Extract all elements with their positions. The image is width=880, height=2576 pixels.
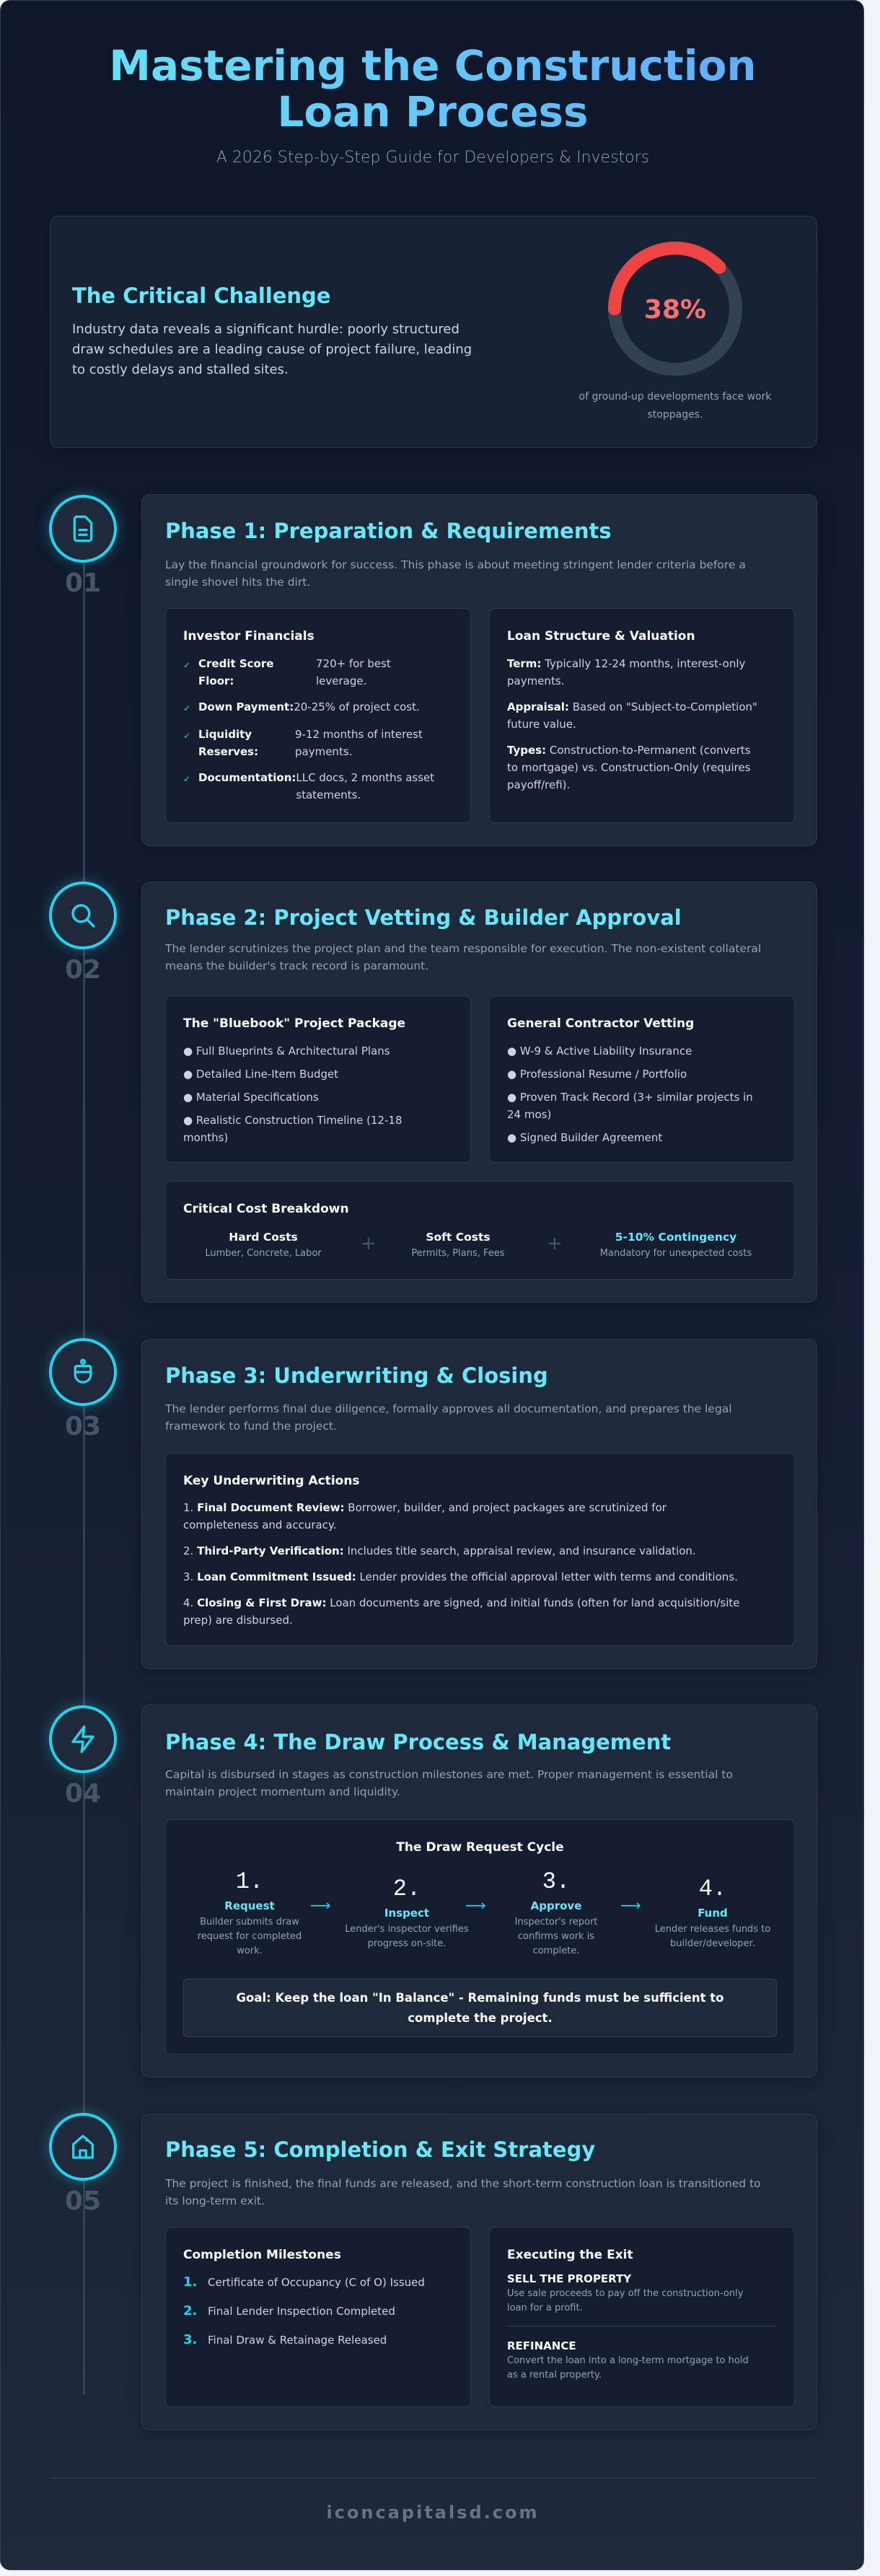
item: contingency: 5-10% Contingency — [615, 1231, 736, 1244]
text: challenge description — [72, 322, 472, 377]
callout: goal in balance: Goal: Keep the loan "In Balance" - Remaining funds must be sufficient to complete the project. — [237, 1991, 723, 2024]
heading: draw request cycle: The Draw Request Cycle — [396, 1840, 564, 1855]
box: loan structure & valuation: future value. — [507, 718, 576, 731]
box: investor financials: Investor Financials — [183, 629, 314, 643]
box: completion milestones — [165, 2227, 471, 2407]
item: hard costs: Hard Costs — [229, 1231, 298, 1244]
box: investor financials: Reserves: — [198, 745, 258, 758]
box: draw request cycle — [165, 1819, 795, 2054]
box: key underwriting actions: 3. Loan Commitment Issued: Lender provides the official approval letter with terms and conditions. — [183, 1570, 738, 1583]
step 4: fund: Lender releases funds to builder/developer. — [655, 1924, 770, 1949]
box: investor financials: 20-25% of project cost. — [294, 700, 420, 713]
item: contingency: Mandatory for unexpected costs — [600, 1248, 752, 1259]
step 3: approve: 3. — [542, 1868, 570, 1895]
box: bluebook package — [165, 995, 471, 1163]
box: loan structure & valuation: payoff/refi). — [507, 778, 570, 791]
icon: phase 1 document — [49, 495, 117, 563]
text: phase 2 description: The lender scrutinizes the project plan and the team responsible for execution. The non-existent collateral — [165, 942, 761, 955]
step 3: approve: Inspector's report confirms work is complete. — [515, 1917, 597, 1956]
box: key underwriting actions: Key Underwriting Actions — [183, 1474, 360, 1488]
text: challenge description: Industry data reveals a significant hurdle: poorly structured — [72, 322, 459, 337]
text: phase 3 description — [164, 1402, 732, 1433]
text: phase 4 description: maintain project momentum and liquidity. — [165, 1785, 400, 1798]
box: investor financials: Floor: — [198, 674, 234, 687]
box: loan structure & valuation — [489, 608, 795, 823]
number 04: 04 — [65, 1779, 101, 1808]
text: phase 3 description: The lender performs final due diligence, formally approves all documentation, and prepares the legal — [165, 1402, 732, 1415]
box: loan structure & valuation: Types: Construction-to-Permanent (converts — [507, 744, 751, 757]
chart: donut 38% — [608, 242, 742, 376]
box: executing the exit: REFINANCE — [507, 2339, 576, 2352]
item: hard costs: Lumber, Concrete, Labor — [205, 1248, 322, 1259]
panel: phase 5 — [141, 2114, 817, 2430]
box: investor financials: payments. — [295, 745, 352, 758]
step 2: inspect: Inspect — [384, 1907, 429, 1920]
subtitle: A 2026 Step-by-Step Guide for Developers & Investors — [216, 149, 649, 167]
text: phase 3 description: framework to fund the project. — [165, 1420, 337, 1433]
step 3: approve — [515, 1868, 597, 1956]
chart: donut 38%: 38% — [644, 295, 706, 325]
timeline line — [83, 529, 85, 2395]
number 01: 01 — [65, 568, 101, 598]
heading: phase 3: Phase 3: Underwriting & Closing — [165, 1363, 548, 1388]
heading: phase 4: Phase 4: The Draw Process & Management — [165, 1730, 671, 1754]
item: soft costs: Permits, Plans, Fees — [411, 1248, 505, 1259]
icon: phase 4 lightning — [49, 1705, 117, 1773]
number 02: 02 — [65, 955, 101, 985]
box: executing the exit: Use sale proceeds to pay off the construction-only — [507, 2288, 743, 2299]
box: key underwriting actions — [165, 1453, 795, 1646]
box: general contractor vetting: ● Proven Track Record (3+ similar projects in — [507, 1091, 753, 1104]
box: bluebook package: months) — [183, 1131, 228, 1144]
box: investor financials: Credit Score — [198, 657, 273, 670]
box: completion milestones: Final Draw & Retainage Released — [208, 2334, 387, 2347]
footer: website: iconcapitalsd.com — [326, 2502, 540, 2523]
step 4: fund: 4. — [699, 1876, 726, 1902]
box: loan structure & valuation: Loan Structure & Valuation — [507, 629, 695, 643]
text: challenge description: draw schedules are a leading cause of project failure, leading — [72, 342, 472, 357]
box: bluebook package: ● Full Blueprints & Architectural Plans — [183, 1045, 390, 1058]
text: phase 5 description — [164, 2177, 761, 2207]
text: phase 1 description: Lay the financial groundwork for success. This phase is about meeting stringent lender criteria before a — [165, 558, 746, 571]
heading: phase 5: Phase 5: Completion & Exit Strategy — [165, 2137, 595, 2162]
text: challenge description: to costly delays and stalled sites. — [72, 362, 289, 377]
box: executing the exit: SELL THE PROPERTY — [507, 2272, 631, 2285]
box: key underwriting actions: 4. Closing & First Draw: Loan documents are signed, and initial funds (often for land acquisition/site — [183, 1596, 739, 1609]
box: completion milestones: Certificate of Occupancy (C of O) Issued — [208, 2276, 425, 2289]
box: investor financials: 720+ for best — [316, 657, 391, 670]
box: bluebook package: ● Material Specifications — [183, 1091, 319, 1104]
box: key underwriting actions: prep) are disbursed. — [183, 1614, 293, 1627]
box: loan structure & valuation: payments. — [507, 674, 564, 687]
panel: phase 2 — [141, 882, 817, 1303]
box: critical cost breakdown — [165, 1181, 795, 1280]
box: investor financials: ✓ — [183, 660, 190, 670]
box: loan structure & valuation: to mortgage) vs. Construction-Only (requires — [507, 761, 750, 774]
box: investor financials: ✓ — [183, 774, 190, 784]
icon: phase 2 magnifier — [49, 882, 117, 949]
text: phase 5 description: The project is finished, the final funds are released, and the short-term construction loan is transitioned to — [165, 2177, 761, 2190]
icon: phase 3 stamp — [49, 1338, 117, 1406]
box: investor financials: statements. — [296, 788, 361, 801]
step 1: request: 1. — [236, 1868, 263, 1895]
step 3: approve: Approve — [531, 1899, 581, 1912]
item: contingency — [600, 1231, 752, 1259]
text: phase 5 description: its long-term exit. — [165, 2194, 265, 2207]
box: executing the exit: loan for a profit. — [507, 2303, 583, 2313]
title: Mastering the Construction — [109, 41, 757, 90]
box: investor financials: Down Payment: — [198, 700, 294, 713]
plus sign: + — [547, 1233, 563, 1254]
box: loan structure & valuation: Term: Typically 12-24 months, interest-only — [507, 657, 745, 670]
box: critical cost breakdown: Critical Cost Breakdown — [183, 1202, 349, 1216]
box: executing the exit: as a rental property. — [507, 2370, 602, 2381]
item: soft costs: Soft Costs — [426, 1231, 490, 1244]
box: investor financials — [165, 608, 471, 823]
item: hard costs — [205, 1231, 322, 1259]
arrow: ⟶ — [310, 1896, 331, 1914]
panel: critical challenge — [50, 216, 817, 448]
text: phase 2 description: means the builder's track record is paramount. — [165, 959, 428, 972]
callout: goal in balance — [183, 1979, 777, 2037]
plus sign: + — [361, 1233, 377, 1254]
title: Loan Process — [277, 87, 589, 136]
box: general contractor vetting: ● Signed Builder Agreement — [507, 1131, 662, 1144]
box: completion milestones: 3. — [183, 2332, 197, 2347]
number 05: 05 — [65, 2186, 101, 2216]
box: investor financials: Documentation: — [198, 771, 296, 784]
box: investor financials: leverage. — [316, 674, 366, 687]
arrow: ⟶ — [620, 1896, 641, 1914]
step 1: request — [198, 1868, 302, 1956]
number 03: 03 — [65, 1412, 101, 1441]
box: completion milestones: 1. — [183, 2274, 197, 2290]
panel: phase 1 — [141, 494, 817, 846]
text: phase 4 description — [165, 1768, 733, 1798]
text: phase 2 description — [164, 942, 761, 972]
box: investor financials: 9-12 months of interest — [295, 728, 423, 741]
panel: phase 4 — [141, 1705, 817, 2078]
box: bluebook package: ● Realistic Construction Timeline (12-18 — [183, 1114, 402, 1127]
box: bluebook package: ● Detailed Line-Item Budget — [183, 1068, 338, 1081]
step 1: request: Builder submits draw request for completed work. — [198, 1917, 302, 1956]
step 4: fund: Fund — [698, 1907, 728, 1920]
box: general contractor vetting: ● W-9 & Active Liability Insurance — [507, 1045, 692, 1058]
caption: donut: of ground-up developments face work stoppages. — [578, 391, 771, 421]
box: executing the exit: Convert the loan into a long-term mortgage to hold — [507, 2355, 749, 2366]
heading: phase 1: Phase 1: Preparation & Requirements — [165, 519, 612, 543]
heading: the critical challenge: The Critical Challenge — [72, 283, 330, 308]
box: key underwriting actions: completeness and accuracy. — [183, 1518, 336, 1531]
box: key underwriting actions: 1. Final Document Review: Borrower, builder, and project packages are scrutinized for — [183, 1501, 666, 1514]
box: general contractor vetting: General Contractor Vetting — [507, 1016, 694, 1031]
icon: phase 5 house — [49, 2113, 117, 2181]
box: investor financials: Liquidity — [198, 728, 252, 741]
box: investor financials: ✓ — [183, 703, 190, 713]
text: phase 1 description: single shovel hits the dirt. — [165, 576, 310, 589]
box: investor financials: LLC docs, 2 months asset — [296, 771, 434, 784]
box: completion milestones: Final Lender Inspection Completed — [208, 2305, 395, 2318]
heading: phase 2: Phase 2: Project Vetting & Builder Approval — [165, 905, 682, 930]
panel: phase 3 — [141, 1339, 817, 1669]
step 2: inspect — [345, 1876, 469, 1949]
item: soft costs — [411, 1231, 505, 1259]
text: phase 4 description: Capital is disbursed in stages as construction milestones are met. Proper management is essential to — [165, 1768, 733, 1781]
step 4: fund — [655, 1876, 770, 1949]
step 2: inspect: Lender's inspector verifies progress on-site. — [345, 1924, 469, 1949]
box: investor financials: ✓ — [183, 731, 190, 741]
box: bluebook package: The "Bluebook" Project Package — [183, 1016, 405, 1031]
box: executing the exit: Executing the Exit — [507, 2248, 633, 2262]
box: key underwriting actions: 2. Third-Party Verification: Includes title search, appraisal review, and insurance validation. — [183, 1544, 696, 1557]
box: general contractor vetting — [489, 995, 795, 1163]
arrow: ⟶ — [465, 1896, 486, 1914]
step 2: inspect: 2. — [393, 1876, 421, 1902]
title — [1, 43, 865, 135]
box: completion milestones: Completion Milestones — [183, 2248, 341, 2262]
box: executing the exit — [489, 2227, 795, 2407]
box: general contractor vetting: ● Professional Resume / Portfolio — [507, 1068, 687, 1081]
text: phase 1 description — [165, 558, 746, 589]
step 1: request: Request — [224, 1899, 275, 1912]
box: loan structure & valuation: Appraisal: Based on "Subject-to-Completion" — [507, 700, 757, 713]
box: general contractor vetting: 24 mos) — [507, 1108, 551, 1121]
box: completion milestones: 2. — [183, 2303, 197, 2318]
